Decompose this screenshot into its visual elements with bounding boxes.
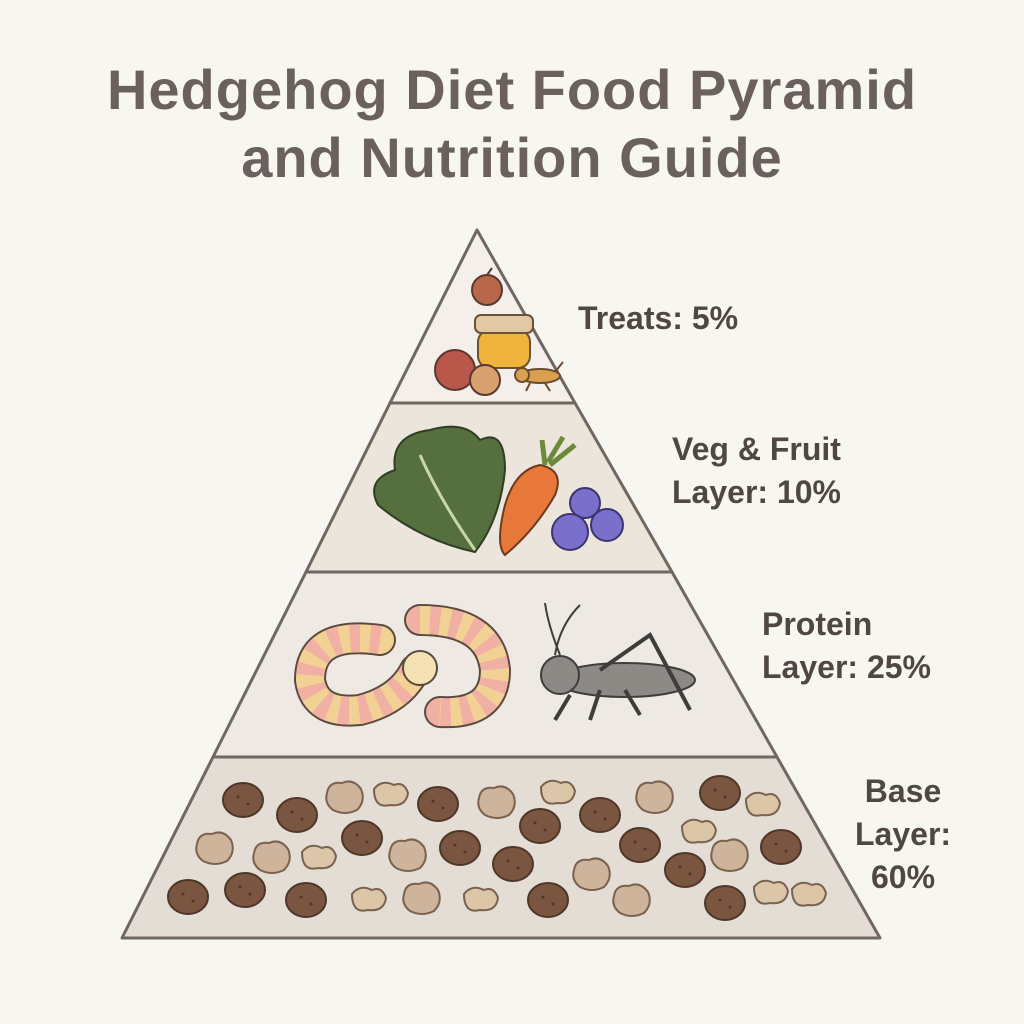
- label: protein: [762, 606, 931, 685]
- icon: mealworms: [310, 620, 495, 712]
- label: base: Layer:: [855, 816, 951, 852]
- label: treats: Treats: 5%: [578, 300, 738, 336]
- label: protein: Layer: 25%: [762, 649, 931, 685]
- label: veg & fruit: [672, 431, 841, 510]
- label: base: [855, 773, 951, 895]
- label: base: Base: [865, 773, 941, 809]
- layer: base: [122, 757, 880, 938]
- pellets: [168, 776, 826, 920]
- icon: lettuce: [374, 427, 505, 552]
- layer: protein: [213, 572, 777, 757]
- icon: cricket: [541, 603, 695, 720]
- icon: small cricket: [515, 362, 563, 391]
- layer: treats: [390, 230, 575, 403]
- label: protein: Protein: [762, 606, 872, 642]
- label: veg & fruit: Veg & Fruit: [672, 431, 841, 467]
- icon: apples: [435, 350, 500, 395]
- icon: blueberries: [552, 488, 623, 550]
- title: and Nutrition Guide: [241, 126, 783, 189]
- icon: honey jar: [475, 315, 533, 368]
- icon: apple top: [472, 268, 502, 305]
- layer: veg & fruit: [306, 403, 672, 572]
- title: [107, 58, 917, 189]
- label: veg & fruit: Layer: 10%: [672, 474, 841, 510]
- label: base: 60%: [871, 859, 935, 895]
- title: Hedgehog Diet Food Pyramid: [107, 58, 917, 121]
- icon: carrot: [500, 437, 575, 555]
